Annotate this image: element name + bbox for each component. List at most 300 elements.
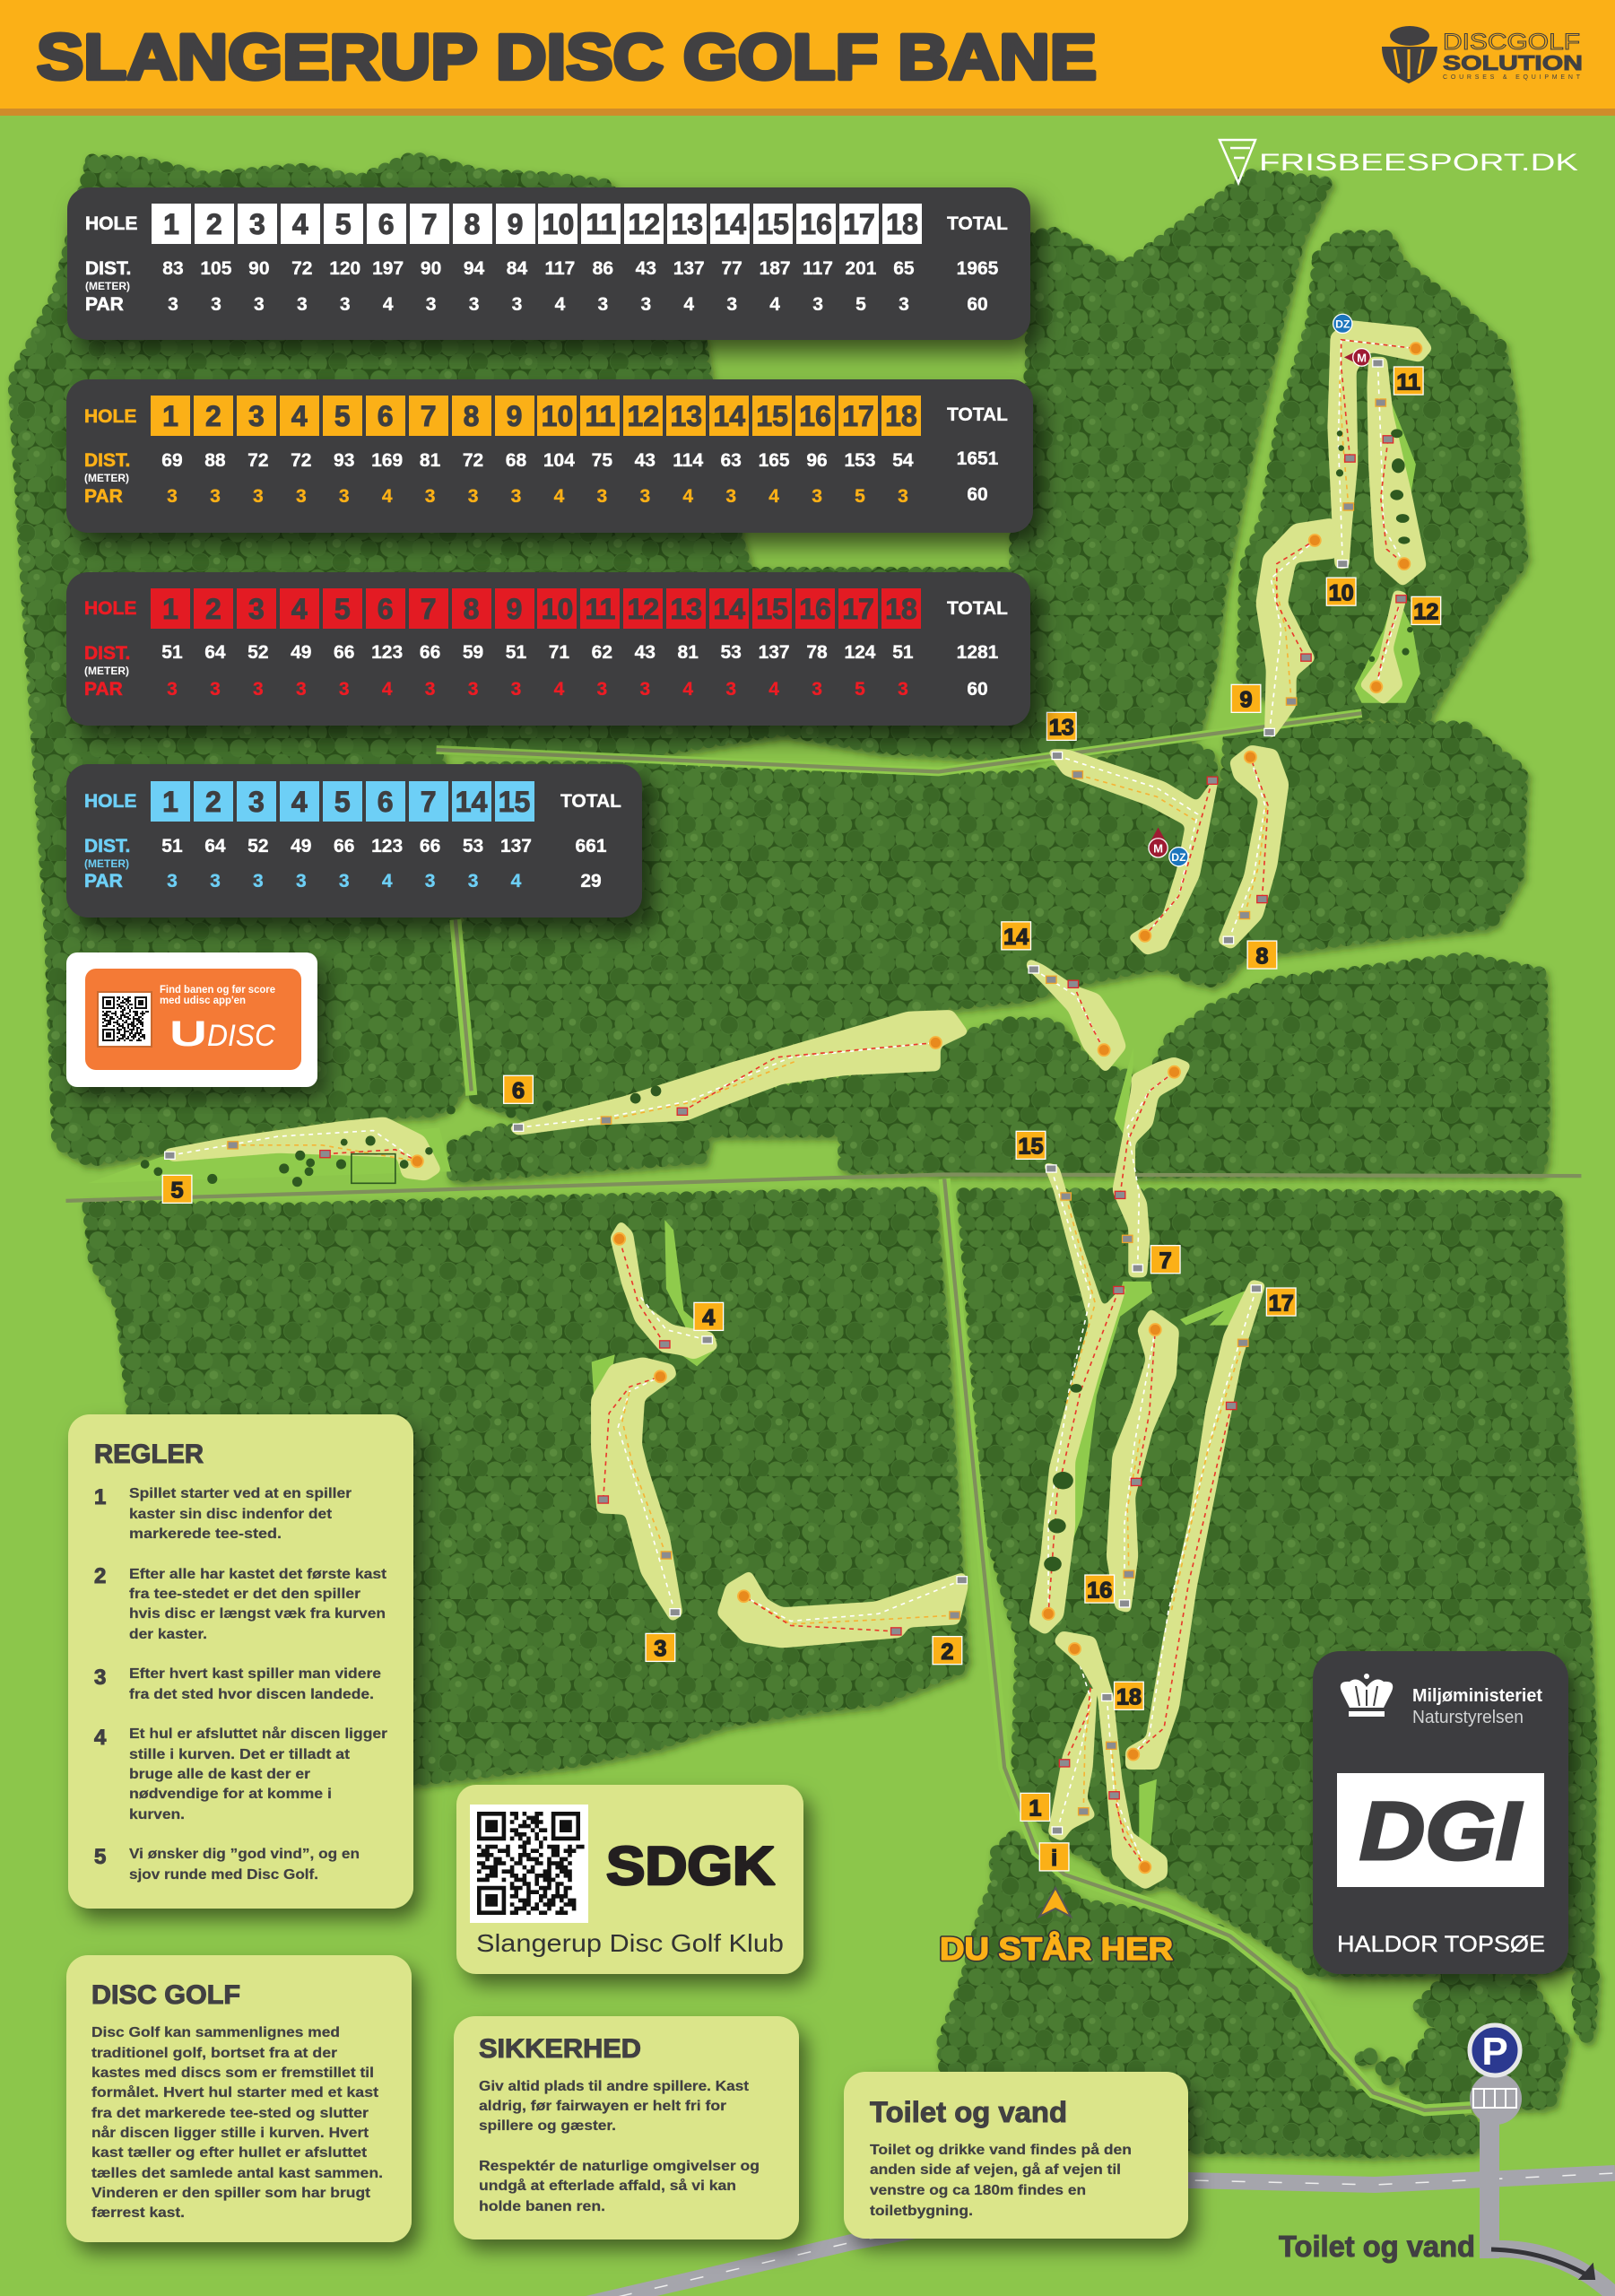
scorecard: red tees: 3 xyxy=(296,679,307,700)
scorecard: white tees: 8 xyxy=(465,208,480,240)
mando and drop zone markers at hole 10 xyxy=(1333,314,1370,366)
scorecard: blue tees: 1 xyxy=(162,786,178,818)
hole 6: 6 xyxy=(512,1079,525,1104)
disc golf text: når discen ligger stille i kurven. Hvert xyxy=(91,2126,369,2141)
scorecard: red tees: 8 xyxy=(464,593,479,625)
scorecard: white tees: (METER) xyxy=(85,280,130,292)
scorecard: white tees: 3 xyxy=(249,208,265,240)
mando and drop zone markers at hole 13: M xyxy=(1153,841,1163,855)
scorecard: white tees: 90 xyxy=(248,258,270,279)
scorecard: orange tees: 4 xyxy=(291,400,308,432)
scorecard: orange tees: 18 xyxy=(885,400,917,432)
safety text xyxy=(479,2079,760,2214)
udisc text: med udisc app'en xyxy=(160,996,246,1006)
scorecard: red tees: 11 xyxy=(585,593,615,625)
scorecard: blue tees: 137 xyxy=(500,836,532,857)
scorecard: white tees: 3 xyxy=(726,294,737,315)
scorecard: white tees: 12 xyxy=(629,208,660,240)
rule 4 xyxy=(94,1726,387,1822)
scorecard: blue tees: 3 xyxy=(296,871,307,891)
scorecard: red tees: 2 xyxy=(205,593,221,625)
toilet text: venstre og ca 180m findes en xyxy=(870,2183,1086,2198)
scorecard: blue tees: 53 xyxy=(463,836,483,857)
scorecard: orange tees: 1651 xyxy=(957,448,998,469)
scorecard: blue tees: 123 xyxy=(371,836,403,857)
scorecard: orange tees: 3 xyxy=(468,486,478,507)
scorecard: red tees: 124 xyxy=(844,642,875,663)
hole 9: 9 xyxy=(1239,688,1253,713)
scorecard: blue tees: 4 xyxy=(291,786,308,818)
par row: PAR xyxy=(84,679,123,700)
scorecard: red tees: 3 xyxy=(248,593,265,625)
road and parking xyxy=(583,2073,1615,2296)
club qr code xyxy=(477,1812,585,1915)
scorecard: red tees: 78 xyxy=(806,642,828,663)
scorecard: red tees: 3 xyxy=(725,679,736,700)
scorecard: red tees: 3 xyxy=(253,679,264,700)
scorecard: red tees: 13 xyxy=(670,593,702,625)
hole 17 xyxy=(1127,1282,1296,1768)
hole row: HOLE xyxy=(84,791,136,812)
rule 4: stille i kurven. Det er tilladt at xyxy=(129,1747,350,1762)
scorecard: white tees: 197 xyxy=(372,258,404,279)
scorecard: red tees: 16 xyxy=(799,593,831,625)
rule 1: markerede tee-sted. xyxy=(129,1526,282,1542)
disc golf text: traditionel golf, bortset fra at der xyxy=(91,2046,337,2061)
scorecard: orange tees: 11 xyxy=(585,400,615,432)
scorecard: white tees: 6 xyxy=(378,208,395,240)
label: toilet direction: Toilet og vand xyxy=(1279,2230,1475,2263)
scorecard: red tees: 3 xyxy=(812,679,822,700)
hole 2 xyxy=(719,1573,967,1665)
panel: disc golf xyxy=(66,1955,412,2242)
rule 4: bruge alle de kast der er xyxy=(129,1767,310,1782)
header bar xyxy=(0,0,1615,116)
scorecard: orange tees: 153 xyxy=(844,450,875,471)
scorecard: blue tees: 64 xyxy=(204,836,226,857)
scorecard: red tees: 10 xyxy=(542,593,573,625)
scorecard: blue tees: 3 xyxy=(253,871,264,891)
scorecard: blue tees: 5 xyxy=(334,786,351,818)
scorecard: white tees: 105 xyxy=(200,258,231,279)
rule 1: 1 xyxy=(94,1485,106,1509)
scorecard: red tees: 64 xyxy=(204,642,226,663)
scorecard: blue tees: 51 xyxy=(161,836,183,857)
udisc qr code xyxy=(98,992,152,1047)
disc golf text: færrest kast. xyxy=(91,2205,185,2221)
scorecard: orange tees: 17 xyxy=(842,400,874,432)
scorecard: orange tees: 69 xyxy=(161,450,183,471)
rule 1: kaster sin disc indenfor det xyxy=(129,1507,332,1522)
disc golf text: fra det markerede tee-sted og slutter xyxy=(91,2106,369,2121)
disc golf heading: DISC GOLF xyxy=(91,1980,240,2010)
scorecard: white tees: 72 xyxy=(291,258,312,279)
hole 13 xyxy=(1046,712,1218,953)
scorecard: white tees: 4 xyxy=(769,294,780,315)
safety text: Respektér de naturlige omgivelser og xyxy=(479,2159,760,2174)
scorecard: white tees: 1965 xyxy=(957,258,998,279)
safety text: aldrig, før fairwayen er helt fri for xyxy=(479,2099,726,2114)
hole 11 xyxy=(1369,359,1425,584)
scorecard: orange tees: 12 xyxy=(628,400,659,432)
scorecard: red tees: 66 xyxy=(420,642,440,663)
rule 2: fra tee-stedet er det den spiller xyxy=(129,1587,360,1602)
hole 3: 3 xyxy=(654,1637,666,1662)
scorecard: blue tees: 3 xyxy=(425,871,435,891)
scorecard: white tees: 117 xyxy=(803,258,833,279)
label: you are here: DU STÅR HER xyxy=(940,1931,1173,1967)
scorecard: red tees: 62 xyxy=(592,642,612,663)
scorecard: red tees: 71 xyxy=(549,642,569,663)
scorecard: white tees: 3 xyxy=(340,294,351,315)
rules heading: REGLER xyxy=(94,1439,204,1469)
scorecard: white tees: 3 xyxy=(512,294,522,315)
scorecard: orange tees: 6 xyxy=(378,400,394,432)
scorecard: blue tees: 7 xyxy=(421,786,437,818)
scorecard: orange tees: 72 xyxy=(247,450,269,471)
scorecard: red tees: 52 xyxy=(247,642,269,663)
scorecard: red tees: 12 xyxy=(628,593,659,625)
scorecard: white tees: 120 xyxy=(329,258,360,279)
hole 11: 11 xyxy=(1396,370,1420,395)
scorecard: orange tees: 14 xyxy=(713,400,745,432)
distance row: DIST. xyxy=(85,258,131,279)
toilet text: anden side af vejen, gå af vejen til xyxy=(870,2162,1121,2178)
hole 4: 4 xyxy=(702,1306,715,1331)
hole 5 xyxy=(141,1118,439,1204)
hole 18: 18 xyxy=(1116,1685,1142,1710)
scorecard: red tees: 5 xyxy=(334,593,351,625)
scorecard: orange tees: 3 xyxy=(898,486,908,507)
scorecard: white tees: 1 xyxy=(163,208,179,240)
scorecard: red tees: 3 xyxy=(339,679,350,700)
rule 2: 2 xyxy=(94,1564,106,1588)
club abbreviation: SDGK xyxy=(606,1836,775,1896)
scorecard: red tees: 3 xyxy=(425,679,435,700)
scorecard: white tees: 84 xyxy=(507,258,527,279)
scorecard: white tees: 3 xyxy=(426,294,436,315)
scorecard: orange tees: 15 xyxy=(756,400,788,432)
panel: toilet and water xyxy=(844,2072,1188,2239)
scorecard: orange tees: 3 xyxy=(639,486,650,507)
scorecard: red tees: 3 xyxy=(597,679,607,700)
scorecard: red tees: 81 xyxy=(678,642,699,663)
scorecard: red tees: 3 xyxy=(639,679,650,700)
scorecard: red tees: 9 xyxy=(507,593,522,625)
scorecard: white tees: 3 xyxy=(640,294,651,315)
scorecard: red tees: 3 xyxy=(898,679,908,700)
scorecard: red tees: 6 xyxy=(378,593,394,625)
panel: udisc xyxy=(66,952,317,1087)
logo: Discgolf Solution: SOLUTION xyxy=(1443,51,1583,74)
mando and drop zone markers at hole 13 xyxy=(1149,828,1188,866)
scorecard: red tees: 5 xyxy=(855,679,865,700)
scorecard: red tees: 53 xyxy=(720,642,742,663)
scorecard: orange tees: 3 xyxy=(812,486,822,507)
scorecard: white tees: 3 xyxy=(254,294,265,315)
scorecard: white tees: 10 xyxy=(543,208,574,240)
scorecard: blue tees: TOTAL xyxy=(560,791,621,812)
par row: PAR xyxy=(85,294,124,315)
scorecard: red tees: 1281 xyxy=(957,642,998,663)
distance row: DIST. xyxy=(84,836,130,857)
title: SLANGERUP DISC GOLF BANE xyxy=(37,22,1097,93)
distance row: DIST. xyxy=(84,450,130,471)
par row: PAR xyxy=(84,486,123,507)
scorecard: white tees: 187 xyxy=(760,258,791,279)
scorecard: blue tees: 4 xyxy=(511,871,521,891)
scorecard: white tees: 3 xyxy=(211,294,221,315)
toilet text xyxy=(870,2143,1132,2219)
scorecard: red tees: 51 xyxy=(892,642,914,663)
rule 5 xyxy=(94,1845,360,1883)
hole row: HOLE xyxy=(85,213,137,234)
disc golf text: Vinderen er den spiller som har brugt xyxy=(91,2186,370,2201)
scorecard: white tees: 4 xyxy=(292,208,308,240)
scorecard: white tees: 3 xyxy=(297,294,308,315)
scorecard: orange tees: 88 xyxy=(204,450,226,471)
scorecard: orange tees: 4 xyxy=(768,486,779,507)
rule 3: Efter hvert kast spiller man videre xyxy=(129,1666,381,1682)
scorecard: blue tees: 3 xyxy=(468,871,478,891)
sponsor: Miljøministeriet xyxy=(1412,1686,1542,1727)
scorecard: white tees: 17 xyxy=(843,208,875,240)
scorecard: red tees: 66 xyxy=(334,642,354,663)
rule 2 xyxy=(94,1564,386,1642)
scorecard: orange tees: 3 xyxy=(167,486,178,507)
scorecard: blue tees: 14 xyxy=(456,786,487,818)
scorecard: red tees: 4 xyxy=(554,679,564,700)
scorecard: red tees: 7 xyxy=(421,593,437,625)
hole 15: 15 xyxy=(1018,1135,1044,1160)
scorecard: blue tees: 661 xyxy=(575,836,607,857)
toilet text: Toilet og drikke vand findes på den xyxy=(870,2143,1132,2158)
udisc text: Find banen og før score xyxy=(160,985,275,996)
hole 10 xyxy=(1326,322,1430,605)
scorecard: white tees: 83 xyxy=(162,258,184,279)
scorecard: red tees: (METER) xyxy=(84,665,129,677)
icon: parking sign: P xyxy=(1481,2030,1508,2074)
scorecard: white tees: 14 xyxy=(714,208,746,240)
scorecard: white tees: 4 xyxy=(683,294,694,315)
disc golf text xyxy=(91,2025,383,2221)
scorecard: red tees: 60 xyxy=(967,679,988,700)
scorecard: blue tees: 3 xyxy=(339,871,350,891)
panel: sponsors xyxy=(1313,1651,1568,1974)
scorecard: orange tees: 72 xyxy=(463,450,483,471)
par row: PAR xyxy=(84,871,123,891)
scorecard: red tees: 4 xyxy=(682,679,693,700)
label: you are here: DU STÅR HER xyxy=(940,1931,1173,1967)
rule 4: Et hul er afsluttet når discen ligger xyxy=(129,1726,387,1742)
scorecard: orange tees: 75 xyxy=(592,450,612,471)
disc golf text: Disc Golf kan sammenlignes med xyxy=(91,2025,340,2040)
scorecard: orange tees: TOTAL xyxy=(947,404,1008,425)
scorecard: red tees: 59 xyxy=(463,642,483,663)
scorecard: orange tees: 60 xyxy=(967,484,988,505)
logo: frisbeesport: FRISBEESPORT.DK xyxy=(1259,149,1578,176)
toilet heading: Toilet og vand xyxy=(870,2096,1067,2128)
rule 4: 4 xyxy=(94,1726,107,1750)
info flag: i xyxy=(1051,1846,1057,1871)
scorecard: white tees: 4 xyxy=(555,294,565,315)
distance row: DIST. xyxy=(84,643,130,664)
scorecard: red tees: 43 xyxy=(635,642,656,663)
rule 3: fra det sted hvor discen landede. xyxy=(129,1687,374,1702)
rule 5: Vi ønsker dig ”god vind”, og en xyxy=(129,1847,360,1862)
udisc text: U xyxy=(169,1014,207,1054)
hole 4 xyxy=(612,1222,724,1358)
scorecard: orange tees: 4 xyxy=(682,486,693,507)
scorecard: orange tees: 3 xyxy=(253,486,264,507)
scorecard: orange tees: 3 xyxy=(296,486,307,507)
scorecard: orange tees: 3 xyxy=(725,486,736,507)
scorecard: red tees: 123 xyxy=(371,642,403,663)
scorecard: red tees xyxy=(66,572,1030,726)
scorecard: orange tees: 16 xyxy=(799,400,831,432)
rule 3 xyxy=(94,1665,381,1702)
scorecard: blue tees xyxy=(66,764,642,918)
scorecard: white tees: 16 xyxy=(800,208,832,240)
scorecard: orange tees: 68 xyxy=(506,450,526,471)
hole 10: 10 xyxy=(1329,580,1354,605)
hole row: HOLE xyxy=(84,598,136,619)
hole row: HOLE xyxy=(84,406,136,427)
mando and drop zone markers at hole 10: DZ xyxy=(1335,318,1350,331)
scorecard: red tees: 15 xyxy=(756,593,788,625)
scorecard: orange tees: 3 xyxy=(339,486,350,507)
hole 12: 12 xyxy=(1413,600,1438,625)
hole 8: 8 xyxy=(1255,944,1269,969)
scorecard: orange tees xyxy=(66,379,1033,533)
scorecard: white tees: 4 xyxy=(383,294,393,315)
scorecard: orange tees: 10 xyxy=(542,400,573,432)
mando and drop zone markers at hole 13: DZ xyxy=(1171,851,1186,864)
hole 14 xyxy=(1002,922,1124,1071)
scorecard: white tees: 43 xyxy=(636,258,656,279)
scorecard: orange tees: 114 xyxy=(673,450,703,471)
sponsor: Haldor Topsøe: HALDOR TOPSØE xyxy=(1337,1932,1545,1957)
scorecard: red tees: 51 xyxy=(506,642,526,663)
scorecard: orange tees: 1 xyxy=(162,400,178,432)
scorecard: orange tees: 5 xyxy=(855,486,865,507)
scorecard: red tees: 51 xyxy=(161,642,183,663)
scorecard: orange tees: (METER) xyxy=(84,472,129,484)
scorecard: orange tees: 3 xyxy=(248,400,265,432)
panel: club xyxy=(456,1785,803,1974)
scorecard: red tees: 18 xyxy=(885,593,917,625)
udisc text: DISC xyxy=(207,1019,275,1053)
scorecard: orange tees: 81 xyxy=(420,450,440,471)
scorecard: orange tees: 2 xyxy=(205,400,221,432)
panel: safety xyxy=(454,2016,799,2239)
scorecard: white tees: 15 xyxy=(757,208,789,240)
scorecard: orange tees: 72 xyxy=(291,450,311,471)
hole 12 xyxy=(1358,592,1441,703)
rule 5: 5 xyxy=(94,1845,106,1869)
hole 6 xyxy=(447,1012,967,1134)
scorecard: red tees: 4 xyxy=(768,679,779,700)
scorecard: white tees: 117 xyxy=(544,258,575,279)
disc golf text: kastes med discs som er fremstillet til xyxy=(91,2066,374,2081)
info flag xyxy=(1039,1843,1069,1871)
scorecard: red tees: 1 xyxy=(162,593,178,625)
scorecard: white tees: 3 xyxy=(168,294,178,315)
safety text: holde banen ren. xyxy=(479,2199,605,2214)
club name: Slangerup Disc Golf Klub xyxy=(476,1929,784,1957)
scorecard: white tees: 86 xyxy=(593,258,613,279)
hole 1: 1 xyxy=(1029,1796,1041,1822)
icon: parking sign xyxy=(1470,2025,1520,2075)
disc golf text: formålet. Hvert hul starter med et kast xyxy=(91,2085,378,2100)
sponsor: DGI logo: DGI xyxy=(1359,1786,1524,1877)
hole 14: 14 xyxy=(1003,925,1029,950)
scorecard: blue tees: (METER) xyxy=(84,857,129,870)
logo: Discgolf Solution xyxy=(1382,26,1583,83)
safety text: spillere og gæster. xyxy=(479,2118,616,2134)
hole 9 xyxy=(1231,520,1335,736)
scorecard: blue tees: 52 xyxy=(247,836,269,857)
hole 15 xyxy=(1016,1131,1124,1633)
scorecard: white tees: TOTAL xyxy=(947,213,1008,234)
logo: Discgolf Solution: DISCGOLF xyxy=(1443,30,1580,55)
scorecard: orange tees: 3 xyxy=(511,486,521,507)
logo: frisbeesport xyxy=(1220,140,1578,183)
safety text: Giv altid plads til andre spillere. Kast xyxy=(479,2079,749,2094)
hole 7: 7 xyxy=(1159,1248,1172,1274)
scorecard: red tees: 14 xyxy=(713,593,745,625)
scorecard: orange tees: 104 xyxy=(543,450,575,471)
toilet text: toiletbygning. xyxy=(870,2204,973,2219)
scorecard: blue tees: 66 xyxy=(334,836,354,857)
hole 18 xyxy=(1055,1633,1166,1888)
scorecard: white tees: 11 xyxy=(586,208,616,240)
safety heading: SIKKERHED xyxy=(479,2034,641,2064)
hole 8 xyxy=(1220,747,1287,969)
logo: Discgolf Solution: COURSES & EQUIPMENT xyxy=(1443,74,1581,81)
scorecard: blue tees: 29 xyxy=(580,871,602,891)
scorecard: blue tees: 3 xyxy=(248,786,265,818)
mando and drop zone markers at hole 10: M xyxy=(1357,351,1367,364)
scorecard: red tees: 3 xyxy=(167,679,178,700)
rule 1: Spillet starter ved at en spiller xyxy=(129,1486,352,1501)
scorecard: white tees: 90 xyxy=(421,258,441,279)
scorecard: white tees: 5 xyxy=(335,208,352,240)
scorecard: white tees: 3 xyxy=(812,294,823,315)
rule 1 xyxy=(94,1485,352,1542)
scorecard: white tees: 7 xyxy=(421,208,438,240)
scorecard: red tees: 17 xyxy=(842,593,874,625)
rule 2: Efter alle har kastet det første kast xyxy=(129,1567,386,1582)
rule 2: der kaster. xyxy=(129,1627,207,1642)
walking paths xyxy=(65,713,1581,2110)
scorecard: blue tees: 4 xyxy=(382,871,393,891)
scorecard: white tees: 201 xyxy=(845,258,876,279)
scorecard: white tees: 3 xyxy=(597,294,608,315)
scorecard: orange tees: 93 xyxy=(334,450,354,471)
scorecard: orange tees: 8 xyxy=(464,400,479,432)
hole 5: 5 xyxy=(171,1178,184,1204)
sponsor: Miljøministeriet: Naturstyrelsen xyxy=(1412,1708,1524,1727)
scorecard: orange tees: 3 xyxy=(210,486,221,507)
scorecard: white tees: 3 xyxy=(469,294,479,315)
scorecard: orange tees: 9 xyxy=(507,400,522,432)
scorecard: blue tees: 66 xyxy=(420,836,440,857)
scorecard: white tees: 9 xyxy=(508,208,523,240)
hole 1 xyxy=(1020,1649,1095,1839)
scorecard: orange tees: 3 xyxy=(425,486,435,507)
scorecard: red tees: TOTAL xyxy=(947,598,1008,619)
